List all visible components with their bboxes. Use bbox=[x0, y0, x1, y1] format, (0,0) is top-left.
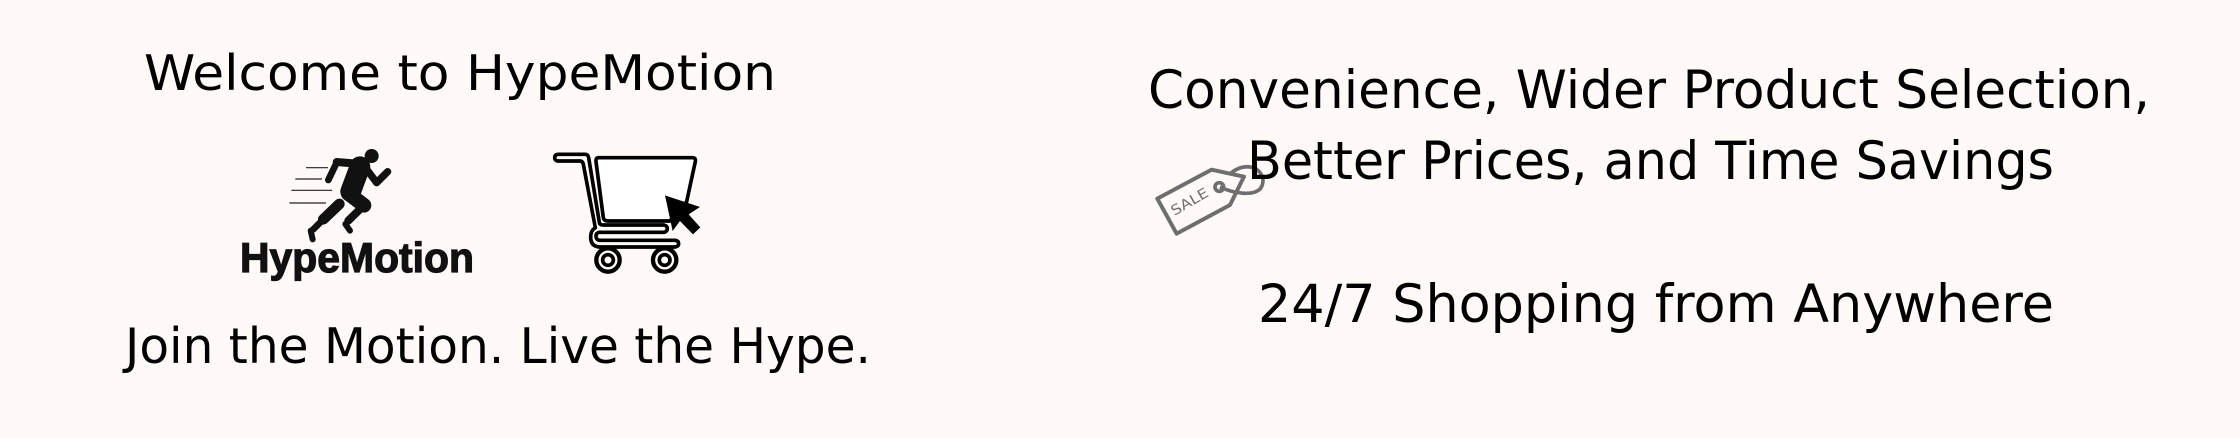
tag string bbox=[1220, 167, 1263, 193]
icon: shopping cart with cursor bbox=[555, 154, 700, 272]
cart frame bbox=[555, 154, 679, 247]
tagline: Join the Motion. Live the Hype. bbox=[122, 318, 871, 375]
icon: running figure bbox=[289, 149, 388, 239]
availability statement: 24/7 Shopping from Anywhere bbox=[1258, 274, 2054, 335]
cursor arrow bbox=[665, 195, 700, 234]
wordmark: HypeMotion bbox=[240, 234, 474, 281]
heading: welcome: Welcome to HypeMotion bbox=[144, 45, 776, 102]
benefits line two: Better Prices, and Time Savings bbox=[1247, 131, 2054, 192]
tag body bbox=[1157, 170, 1244, 234]
cart basket bbox=[596, 158, 695, 221]
icon: sale tag bbox=[1157, 167, 1263, 234]
tag label: SALE bbox=[1168, 185, 1212, 219]
cart wheels bbox=[596, 248, 620, 272]
benefits line one: Convenience, Wider Product Selection, bbox=[1148, 60, 2150, 121]
logo: HypeMotion runner and wordmark bbox=[240, 149, 474, 281]
